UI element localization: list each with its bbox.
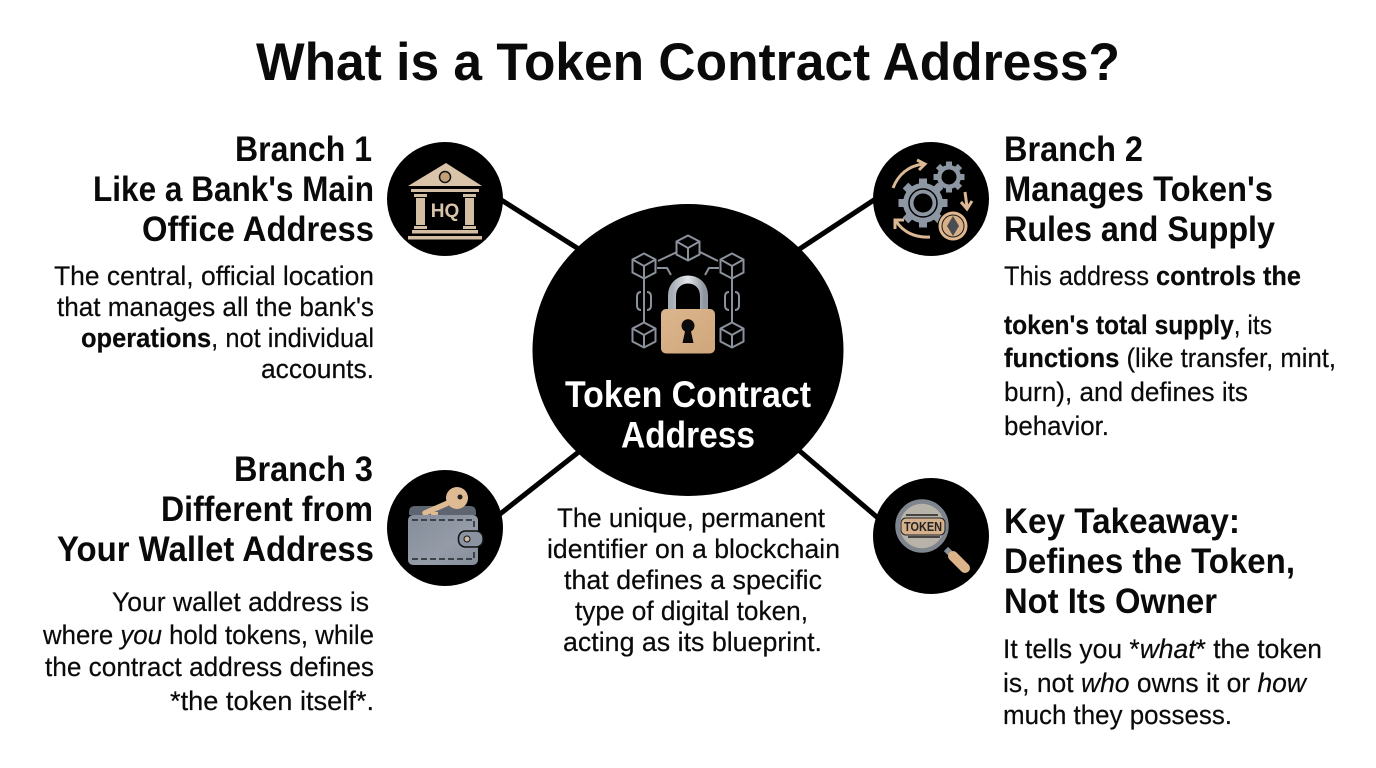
key takeaway heading: Key Takeaway: — [1004, 502, 1240, 541]
branch 3 text: the contract address defines — [45, 652, 374, 682]
branch 2 text: token's total supply, its — [1004, 310, 1272, 340]
branch 1 heading: Like a Bank's Main — [93, 170, 374, 209]
branch 2 text: burn), and defines its — [1004, 377, 1248, 407]
title: What is a Token Contract Address? — [256, 33, 1120, 92]
branch 2 text: behavior. — [1004, 411, 1109, 441]
branch 2 text: This address controls the — [1004, 261, 1301, 291]
key takeaway text: is, not who owns it or how — [1003, 668, 1307, 698]
branch 3 text: where you hold tokens, while — [42, 620, 374, 650]
hub label — [565, 374, 811, 456]
key takeaway text: much they possess. — [1003, 700, 1232, 730]
branch 1 heading: Office Address — [142, 210, 374, 249]
hub description — [547, 503, 840, 657]
icon: bank HQ — [387, 142, 503, 256]
branch 2 heading: Rules and Supply — [1004, 210, 1275, 249]
branch 1 text: operations, not individual — [81, 323, 374, 353]
branch 3 heading: Branch 3 — [234, 450, 373, 489]
branch 1 text: The central, official location — [54, 261, 374, 291]
key takeaway text: It tells you *what* the token — [1003, 634, 1322, 664]
branch 1 text: that manages all the bank's — [57, 292, 374, 322]
icon: wallet with key — [387, 470, 503, 586]
branch 2 heading: Branch 2 — [1004, 130, 1143, 169]
icon: magnifier over token: TOKEN — [904, 520, 942, 534]
connector lines — [495, 196, 885, 524]
hub description: type of digital token, — [575, 596, 808, 626]
icon: gears and token — [873, 142, 989, 256]
central hub — [532, 204, 844, 496]
hub description: that defines a specific — [564, 565, 822, 595]
icon: bank HQ: HQ — [431, 201, 459, 222]
branch 1 text: accounts. — [261, 354, 374, 384]
branch 3 text: *the token itself*. — [170, 686, 374, 716]
key takeaway heading — [1004, 502, 1295, 621]
branch 2 text: functions (like transfer, mint, — [1004, 343, 1336, 373]
key takeaway text — [1003, 634, 1322, 730]
branch 3 heading: Your Wallet Address — [57, 530, 374, 569]
branch 2 heading — [1004, 130, 1275, 249]
hub label: Token Contract — [565, 374, 811, 415]
branch 1 heading: Branch 1 — [235, 130, 372, 169]
branch 1 text — [54, 261, 374, 384]
branch 3 text — [42, 587, 374, 716]
branch 3 heading: Different from — [161, 490, 373, 529]
branch 3 heading — [57, 450, 374, 569]
branch 3 text: Your wallet address is — [112, 587, 369, 617]
hub description: acting as its blueprint. — [563, 627, 822, 657]
branch 2 heading: Manages Token's — [1004, 170, 1273, 209]
icon: magnifier over token — [873, 478, 989, 594]
hub label: Address — [621, 414, 755, 456]
key takeaway heading: Defines the Token, — [1004, 542, 1295, 581]
branch 2 text — [1004, 261, 1336, 441]
branch 1 heading — [93, 130, 374, 249]
key takeaway heading: Not Its Owner — [1004, 582, 1217, 621]
hub description: The unique, permanent — [557, 503, 825, 533]
hub description: identifier on a blockchain — [547, 534, 840, 564]
icon: padlock on blockchain — [632, 236, 744, 354]
